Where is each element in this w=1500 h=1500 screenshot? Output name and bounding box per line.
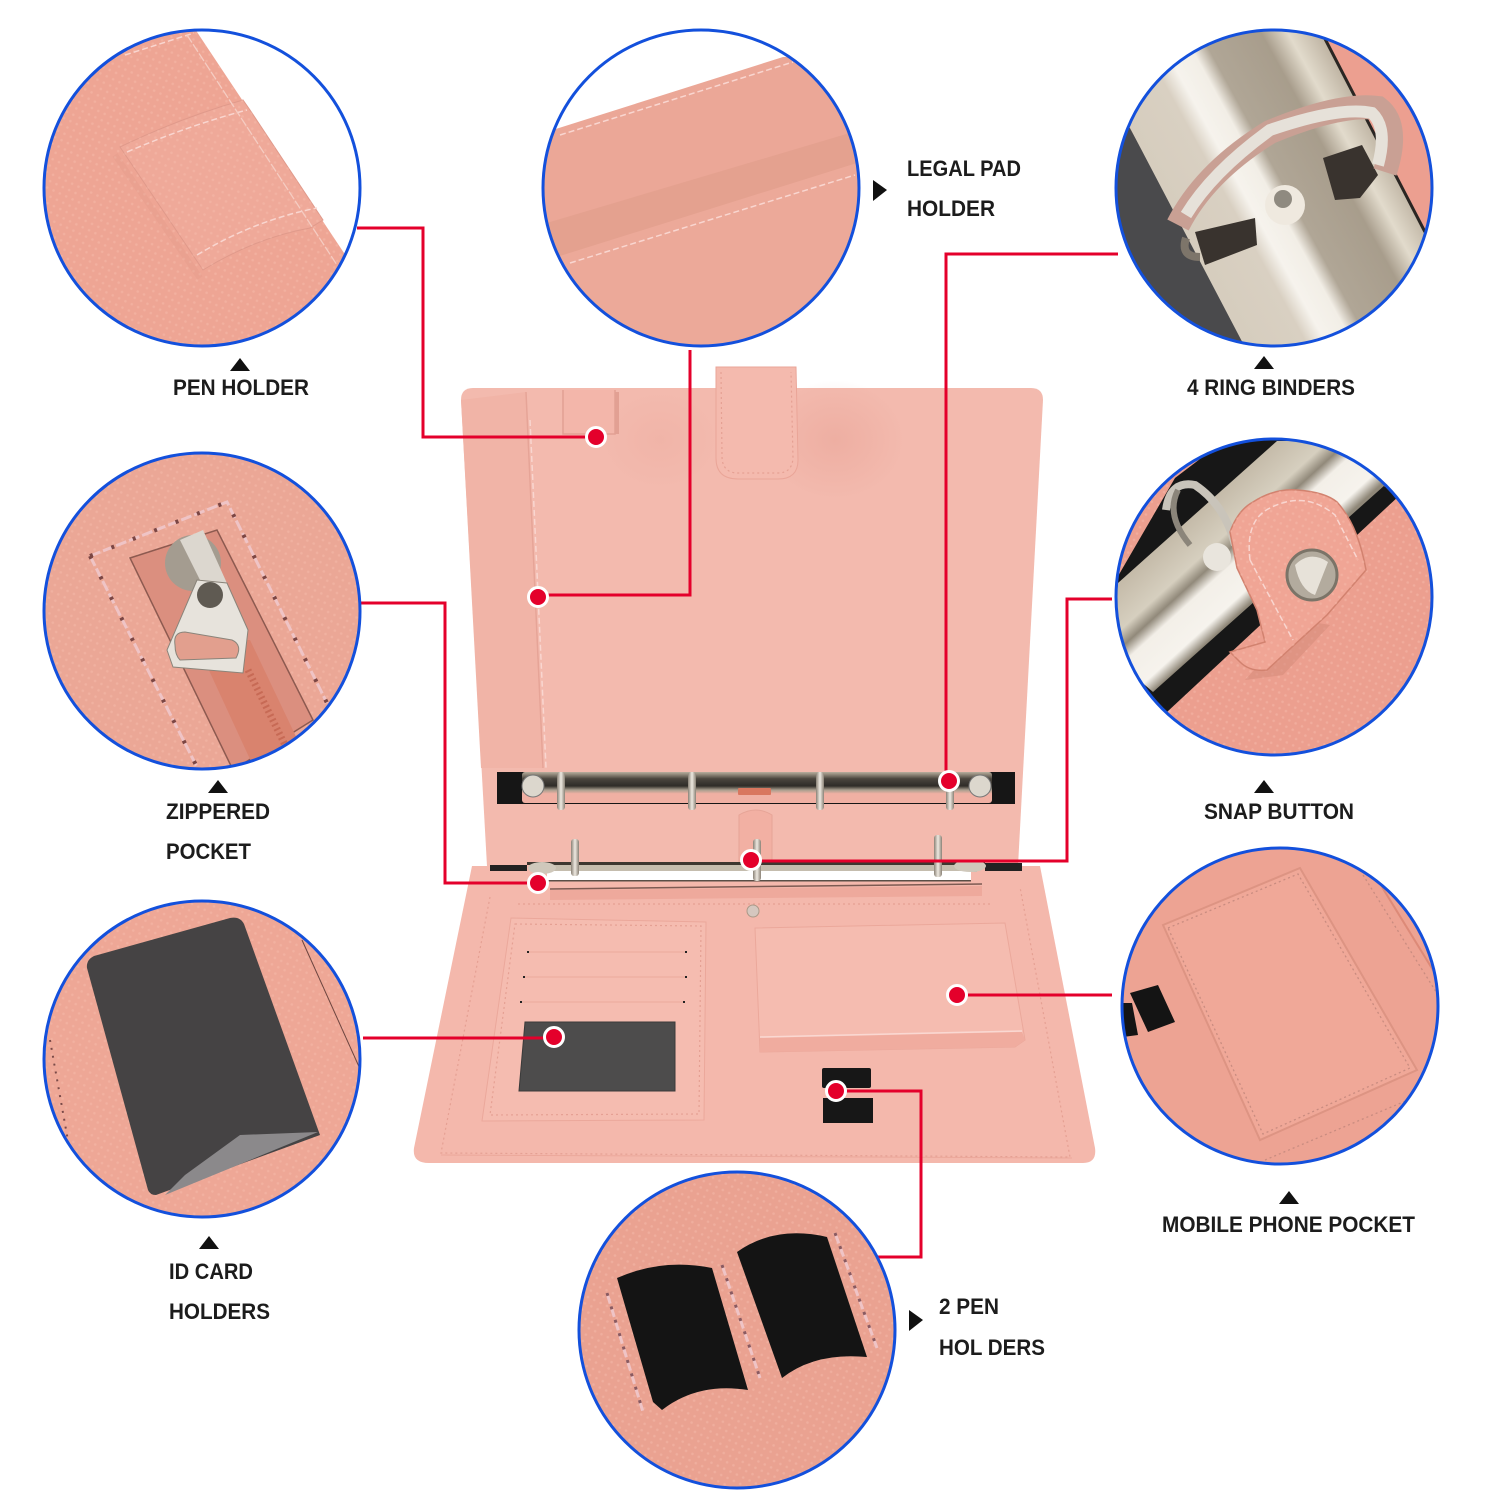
snap strap [716, 367, 798, 479]
label: snap button [1204, 780, 1354, 824]
panel: two pen holders detail circle [575, 1168, 900, 1493]
elastic pen loops [822, 1068, 873, 1123]
label: ID card holders [169, 1236, 270, 1324]
label: zippered pocket: ZIPPERED [166, 799, 270, 824]
label: zippered pocket [166, 780, 270, 864]
phone pocket [755, 923, 1025, 1052]
label: 2 pen holders [909, 1294, 1045, 1360]
bottom snap tab [739, 810, 772, 866]
label: legal pad holder: LEGAL PAD [907, 156, 1021, 181]
label: 2 pen holders: HOL DERS [939, 1335, 1045, 1360]
panel: ID card holder detail circle [40, 898, 365, 1223]
id window [519, 1022, 675, 1091]
panel: zippered pocket detail circle [40, 450, 365, 775]
label: snap button: SNAP BUTTON [1204, 799, 1354, 824]
top cover panel [461, 380, 1043, 866]
label: mobile phone pocket: MOBILE PHONE POCKET [1162, 1212, 1416, 1237]
label: mobile phone pocket [1162, 1191, 1416, 1237]
label: ID card holders: HOLDERS [169, 1299, 270, 1324]
label: zippered pocket: POCKET [166, 839, 252, 864]
label: 4 ring binders: 4 RING BINDERS [1187, 375, 1355, 400]
panel: ring binder detail circle [1112, 20, 1437, 351]
card holder pocket [482, 918, 706, 1121]
bottom cover panel [414, 866, 1095, 1163]
ring binder top bar [497, 772, 1015, 810]
main product: open pink binder folio [414, 367, 1095, 1163]
panel: legal pad holder detail circle [540, 30, 870, 351]
panel: snap button detail circle [1110, 436, 1437, 761]
label: 4 ring binders [1187, 356, 1355, 400]
panel: mobile phone pocket detail circle [1118, 844, 1443, 1169]
label: ID card holders: ID CARD [169, 1259, 253, 1284]
label: legal pad holder: HOLDER [907, 196, 995, 221]
label: pen holder: PEN HOLDER [173, 375, 309, 400]
label: 2 pen holders: 2 PEN [939, 1294, 999, 1319]
label: pen holder [173, 358, 309, 400]
lower ring bar [490, 835, 1022, 882]
panel: pen holder detail circle [40, 26, 360, 351]
label: legal pad holder [873, 156, 1021, 221]
callout lines and hotspot dots [357, 228, 1118, 1257]
snap stud [747, 905, 759, 917]
